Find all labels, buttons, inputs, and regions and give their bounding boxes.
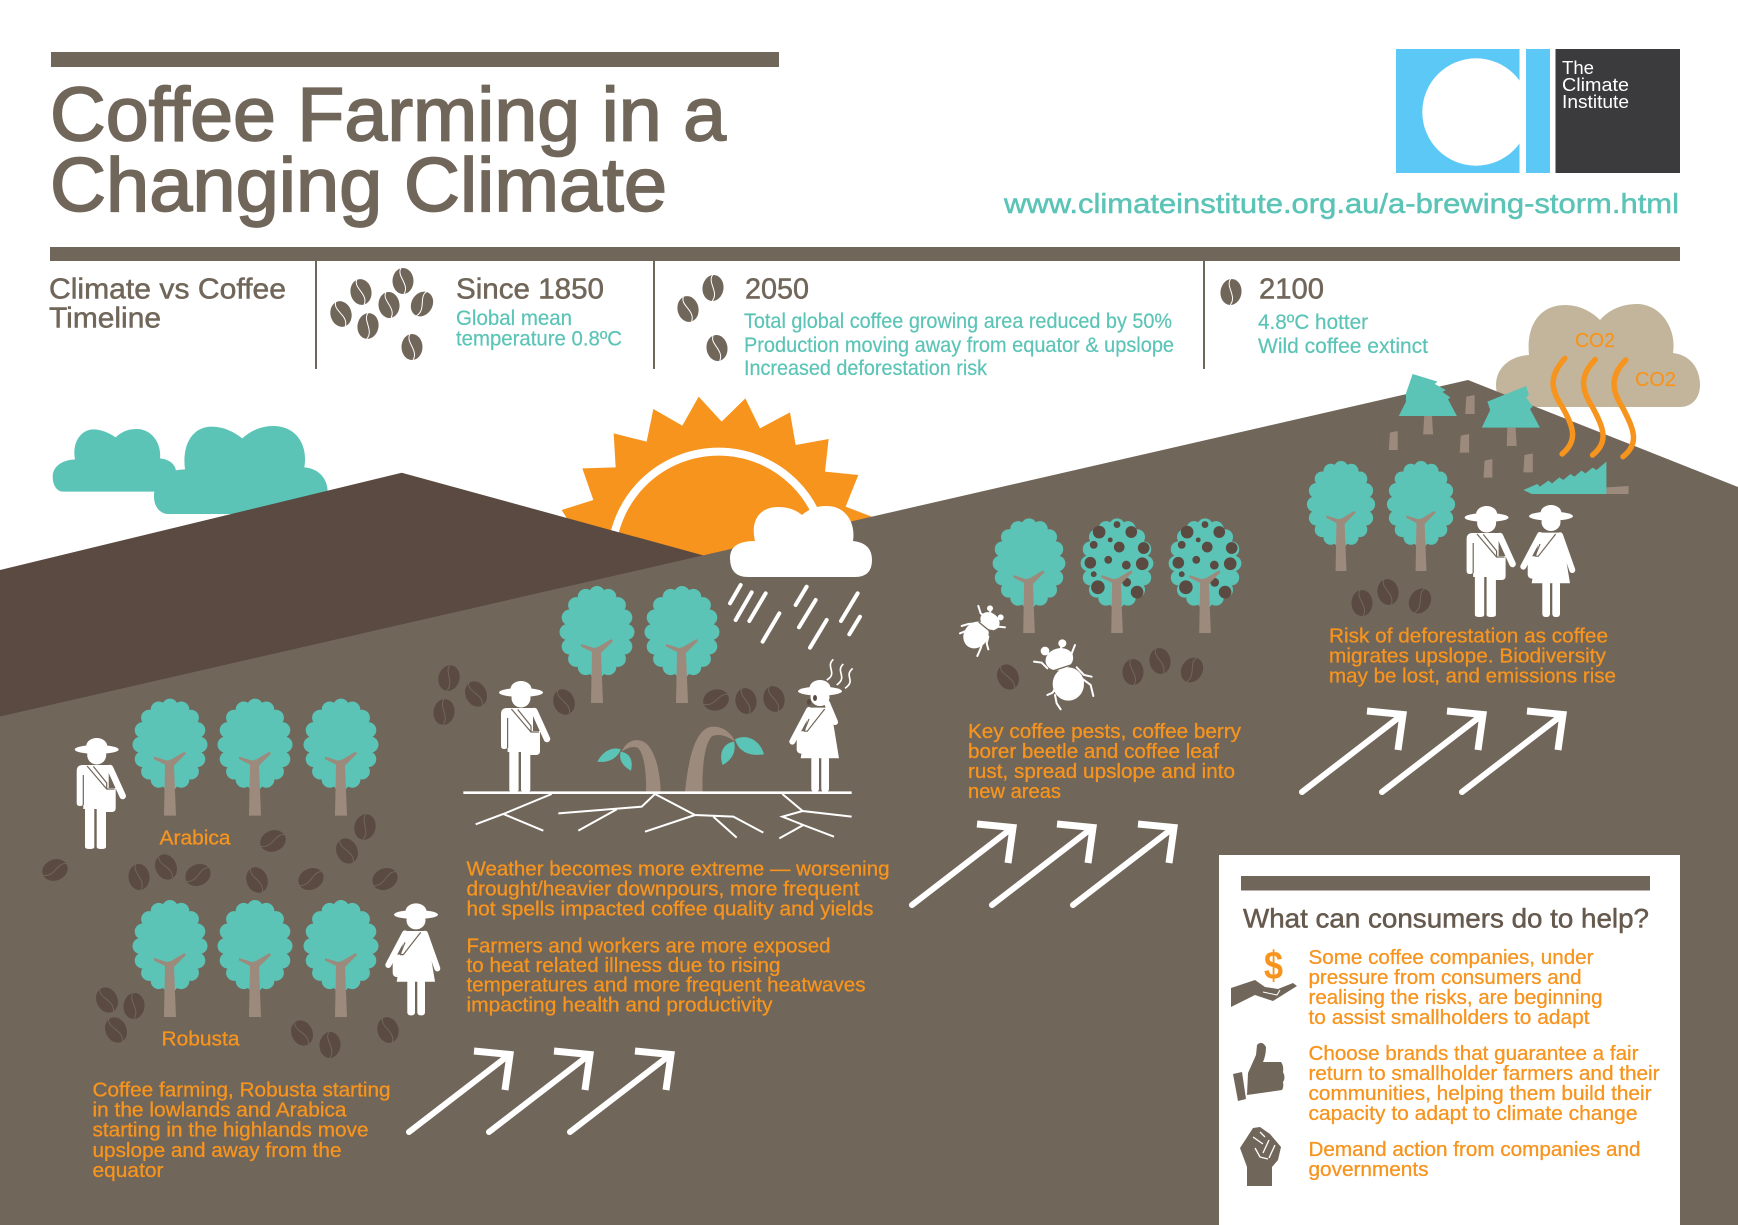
text: coffee farming moves upslope: upslope and away from the: [92, 1139, 342, 1162]
logo: The Climate Institute: The: [1562, 57, 1594, 78]
text: deforestation: [1329, 624, 1616, 688]
timeline: since 1850: [456, 274, 622, 350]
text: choose fair brands: [1308, 1042, 1660, 1125]
text: coffee farming moves upslope: equator: [92, 1159, 164, 1182]
text: deforestation: may be lost, and emissions rise: [1329, 664, 1616, 688]
logo: The Climate Institute: [1396, 49, 1680, 173]
text: heat exposure: impacting health and productivity: [466, 994, 773, 1017]
text: pests: Key coffee pests, coffee berry: [968, 720, 1242, 743]
farming couple: [1465, 505, 1573, 617]
text: extreme weather: Weather becomes more extreme — worsening: [466, 858, 890, 881]
timeline: 2100: [1258, 274, 1428, 358]
timeline heading: [49, 274, 286, 334]
robusta label: Robusta: [162, 1028, 240, 1051]
back hill: [0, 473, 720, 730]
timeline: 2100: 4.8ºC hotter: [1258, 311, 1368, 334]
mid-slope trees: [560, 586, 720, 703]
arabica label: Arabica: [160, 826, 231, 849]
text: demand action: Demand action from companies and: [1308, 1138, 1640, 1161]
text: pests: rust, spread upslope and into: [968, 760, 1235, 783]
timeline: 2050: Increased deforestation risk: [744, 357, 987, 380]
timeline dividers: [315, 261, 1205, 369]
text: heat exposure: temperatures and more frequent heatwaves: [466, 974, 866, 997]
arrows: stage 3: [1302, 711, 1563, 792]
text: coffee farming moves upslope: starting in the highlands move: [92, 1119, 368, 1142]
icon: beans 2050: [675, 274, 729, 362]
timeline: since 1850: Since 1850: [456, 274, 604, 306]
icon: hand with dollar: $: [1264, 944, 1283, 988]
text: demand action: governments: [1308, 1158, 1428, 1181]
wilting saplings: [597, 727, 764, 792]
text: choose fair brands: communities, helping them build their: [1308, 1082, 1652, 1105]
timeline heading: Timeline: [49, 302, 161, 334]
text: extreme weather: [466, 858, 890, 921]
icon: beans since 1850: [327, 268, 438, 360]
text: choose fair brands: Choose brands that guarantee a fair: [1308, 1042, 1639, 1065]
text: assist smallholders: Some coffee companies, under: [1308, 946, 1594, 969]
timeline: 2100: 2100: [1259, 274, 1324, 306]
panel: what can consumers do: [1219, 855, 1680, 1225]
text: choose fair brands: capacity to adapt to climate change: [1308, 1102, 1638, 1125]
text: heat exposure: Farmers and workers are more exposed: [466, 934, 830, 957]
text: extreme weather: drought/heavier downpours, more frequent: [466, 878, 860, 901]
female farmer: [388, 903, 438, 1015]
cracked ground: [463, 793, 852, 838]
scattered beans: mid-slope: [431, 663, 788, 727]
emissions cloud: [1496, 304, 1700, 407]
text: heat exposure: [466, 934, 866, 1017]
icon: bean 2100: [1219, 278, 1243, 306]
text: choose fair brands: return to smallholder farmers and their: [1308, 1062, 1660, 1085]
overheated female farmer: [792, 659, 853, 792]
heat waves rising from felled forest: [1553, 358, 1634, 457]
website url: www.climateinstitute.org.au/a-brewing-storm.html: [1003, 188, 1679, 219]
beetles: [958, 605, 1093, 709]
title: [50, 72, 727, 228]
top rule: [51, 52, 779, 67]
title: Changing Climate: [50, 143, 667, 228]
text: assist smallholders: [1308, 946, 1602, 1029]
timeline: 2050: Total global coffee growing area reduced by 50%: [744, 310, 1172, 333]
panel heading: What can consumers do to help?: [1243, 904, 1649, 934]
scattered beans: lowlands: [39, 812, 402, 1059]
farmer on dry ground: [499, 681, 547, 792]
upslope trees: [1307, 461, 1455, 571]
text: assist smallholders: realising the risks, are beginning: [1308, 986, 1602, 1009]
deforestation: stumps and conifers: [1389, 374, 1629, 494]
CO2 labels: CO2: [1635, 369, 1676, 391]
main hillside: [0, 380, 1738, 1225]
text: extreme weather: hot spells impacted coffee quality and yields: [466, 898, 874, 921]
pest-affected trees: [993, 518, 1241, 633]
text: assist smallholders: to assist smallholders to adapt: [1308, 1006, 1590, 1029]
arabica trees: [132, 699, 378, 816]
text: assist smallholders: pressure from consumers and: [1308, 966, 1582, 989]
text: deforestation: migrates upslope. Biodiversity: [1329, 644, 1607, 668]
storm cloud with rain: [730, 506, 872, 648]
text: pests: borer beetle and coffee leaf: [968, 740, 1219, 763]
logo: The Climate Institute: Institute: [1562, 91, 1629, 112]
timeline: since 1850: temperature 0.8ºC: [456, 328, 622, 350]
icon: hand with dollar: [1231, 944, 1297, 1007]
timeline: since 1850: Global mean: [456, 307, 572, 330]
timeline: 2050: 2050: [745, 274, 809, 306]
text: coffee farming moves upslope: [92, 1078, 390, 1182]
timeline: 2050: Production moving away from equator & upslope: [744, 334, 1174, 357]
text: pests: [968, 720, 1242, 803]
text: demand action: [1308, 1138, 1640, 1181]
CO2 labels: CO2: [1575, 330, 1615, 352]
upslope beans: [1352, 577, 1436, 618]
text: deforestation: Risk of deforestation as coffee: [1329, 624, 1608, 648]
CO2 labels: [1575, 330, 1676, 391]
text: pests: new areas: [968, 780, 1061, 803]
icon: thumbs up: [1233, 1043, 1284, 1101]
timeline: 2050: [744, 274, 1174, 380]
arrows: stage 2: [912, 824, 1174, 905]
arrows: stage 1: [409, 1051, 671, 1132]
timeline: 2100: Wild coffee extinct: [1258, 335, 1428, 358]
text: coffee farming moves upslope: in the lowlands and Arabica: [92, 1099, 347, 1122]
sun: [562, 397, 872, 666]
logo: The Climate Institute: Climate: [1562, 74, 1629, 95]
teal clouds: [53, 426, 328, 514]
text: heat exposure: to heat related illness due to rising: [466, 954, 780, 977]
timeline rule: [50, 247, 1680, 261]
beans near pests: [993, 646, 1208, 693]
text: coffee farming moves upslope: Coffee farming, Robusta starting: [92, 1078, 390, 1101]
title: Coffee Farming in a: [50, 72, 727, 158]
timeline heading: Climate vs Coffee: [49, 274, 286, 306]
icon: raised fist: [1240, 1127, 1281, 1186]
robusta trees: [132, 900, 378, 1017]
male farmer: [75, 738, 123, 849]
